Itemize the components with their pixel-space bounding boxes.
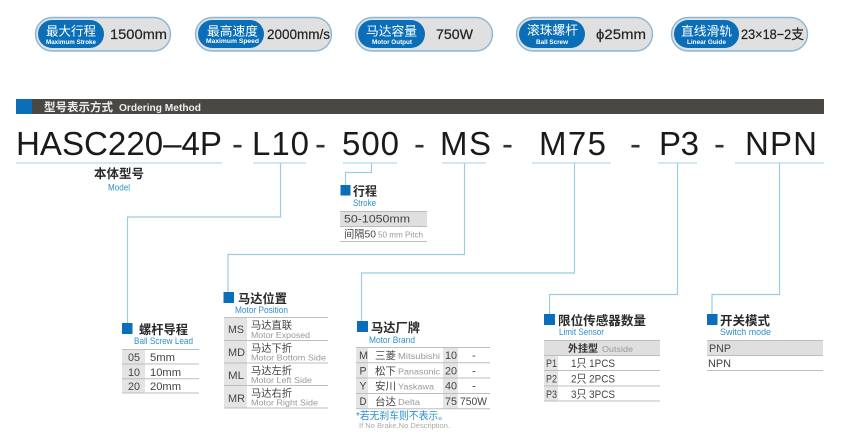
model code string: P3 — [659, 125, 699, 162]
panel: motor brand: 安川 — [375, 380, 396, 392]
panel: limit sensor: P2 — [546, 374, 557, 386]
panel: motor brand: 20 — [445, 366, 457, 378]
model code string — [16, 125, 817, 162]
panel: motor position: 马达下折 — [251, 342, 292, 354]
panel: motor position: Motor Left Side — [251, 375, 312, 385]
panel: motor brand: 750W — [460, 396, 487, 408]
spec badge: maximum stroke — [36, 18, 170, 51]
panel: motor position: 马达左折 — [251, 364, 292, 377]
panel: motor position: MR — [228, 393, 245, 405]
spec badge: maximum speed: 2000mm/s — [267, 27, 330, 42]
model code string: 500 — [342, 125, 399, 162]
underlines and connector lines — [16, 163, 824, 323]
panel: motor position: Motor Bottom Side — [251, 352, 326, 362]
panel: motor brand: D — [360, 396, 366, 408]
panel: ball screw lead: 10mm — [150, 367, 181, 379]
panel: motor position: 马达右折 — [251, 386, 292, 400]
panel: motor position: Motor Exposed — [251, 330, 310, 340]
panel: stroke: 间隔50 — [344, 228, 376, 240]
model code string: - — [714, 125, 725, 162]
panel: motor position: 马达位置 — [238, 291, 287, 306]
panel: stroke: 行程 — [353, 184, 377, 198]
panel: motor brand: 40 — [445, 380, 457, 392]
panel: ball screw lead: 20 — [128, 381, 140, 393]
model code string: MS — [440, 125, 491, 162]
panel: motor brand: Mitsubishi — [398, 351, 440, 361]
model code string: - — [414, 125, 425, 162]
panel: ball screw lead: 05 — [128, 352, 140, 364]
panel: switch mode: 开关模式 — [720, 313, 771, 328]
model code string: L10 — [252, 125, 309, 162]
model code string: - — [630, 125, 641, 162]
spec badge: linear guide: Linear Guide — [687, 40, 727, 46]
label: body model — [94, 166, 144, 192]
panel: switch mode: NPN — [708, 358, 731, 370]
panel: limit sensor: 外挂型 — [568, 342, 598, 355]
panel: stroke: 50-1050mm — [344, 214, 410, 226]
panel: motor brand: 松下 — [375, 364, 396, 378]
panel: limit sensor: Outside — [602, 344, 633, 354]
spec badge: maximum stroke: Maximum Stroke — [46, 40, 97, 46]
spec badge: motor output: 马达容量 — [366, 24, 417, 38]
spec badge: motor output: Motor Output — [372, 40, 412, 46]
panel: limit sensor: 限位传感器数量 — [558, 313, 646, 328]
panel: limit sensor: P1 — [546, 358, 557, 370]
panel: motor brand: P — [360, 366, 366, 378]
panel: motor position: MS — [228, 324, 244, 336]
panel: motor position: Motor Position — [235, 305, 288, 315]
spec badge: motor output — [356, 18, 492, 51]
spec badge: linear guide: 直线滑轨 — [681, 24, 732, 38]
section heading bar: ordering method: Ordering Method — [119, 102, 201, 114]
panel: stroke — [340, 184, 427, 242]
spec badge: maximum stroke: 1500mm — [110, 27, 167, 42]
panel: motor brand: Yaskawa — [398, 382, 434, 392]
panel: switch mode: PNP — [709, 343, 731, 355]
spec badge: motor output: 750W — [436, 27, 473, 42]
footnote: no brake — [356, 409, 450, 430]
panel: motor brand: 10 — [445, 350, 457, 362]
label: body model: Model — [108, 182, 130, 192]
spec badge: ball screw: 滚珠螺杆 — [527, 22, 578, 38]
panel: ball screw lead: 5mm — [150, 352, 175, 364]
section heading bar: ordering method — [16, 99, 824, 114]
spec badge: maximum speed — [196, 18, 332, 51]
model code string: - — [502, 125, 513, 162]
spec badge: maximum speed: 最高速度 — [207, 24, 258, 38]
panel: limit sensor: P3 — [546, 389, 557, 401]
panel: ball screw lead: Ball Screw Lead — [134, 336, 193, 346]
panel: motor brand: 马达厂牌 — [371, 320, 420, 335]
panel: ball screw lead — [122, 322, 199, 393]
panel: motor brand: 75 — [445, 396, 457, 408]
panel: motor brand: - — [472, 380, 476, 392]
spec badge: maximum stroke: 最大行程 — [46, 24, 96, 38]
panel: motor brand: M — [359, 350, 368, 362]
panel: motor brand: 三菱 — [375, 350, 396, 362]
panel: motor brand: Y — [360, 380, 367, 392]
footnote: no brake: If No Brake,No Description. — [359, 421, 450, 430]
panel: motor position: 马达直联 — [251, 318, 292, 332]
model code string: NPN — [745, 125, 817, 162]
spec badge: linear guide: 23×18−2支 — [741, 27, 804, 42]
panel: motor brand — [356, 320, 490, 409]
spec badge: linear guide — [672, 18, 808, 51]
model code string: HASC220–4P — [16, 125, 222, 162]
panel: stroke: 50 mm Pitch — [378, 230, 423, 240]
panel: motor position: ML — [228, 370, 244, 382]
panel: motor brand: - — [472, 366, 476, 378]
spec badge: ball screw: ϕ25mm — [596, 27, 646, 42]
spec badge: ball screw — [516, 18, 652, 51]
panel: ball screw lead: 20mm — [150, 381, 181, 393]
panel: switch mode: Switch mode — [720, 327, 771, 337]
panel: ball screw lead: 螺杆导程 — [139, 322, 188, 337]
model code string: M75 — [539, 125, 606, 162]
panel: stroke: Stroke — [353, 198, 376, 208]
footnote: no brake: *若无刹车则不表示。 — [356, 409, 448, 422]
model code string: - — [232, 125, 243, 162]
panel: limit sensor — [544, 313, 660, 401]
panel: motor brand: Delta — [398, 397, 420, 407]
label: body model: 本体型号 — [94, 166, 144, 181]
panel: motor position: MD — [228, 347, 245, 359]
spec badge: maximum speed: Maximum Speed — [206, 39, 259, 45]
panel: motor brand: Panasonic — [398, 366, 441, 376]
panel: motor position — [224, 291, 328, 408]
section heading bar: ordering method: 型号表示方式 — [44, 100, 114, 114]
panel: motor position: Motor Right Side — [251, 398, 318, 408]
panel: motor brand: Motor Brand — [369, 335, 415, 345]
panel: limit sensor: Limit Sensor — [559, 327, 604, 337]
panel: limit sensor: 1只 1PCS — [571, 358, 615, 370]
panel: switch mode — [707, 313, 823, 370]
panel: motor brand: 台达 — [375, 395, 396, 408]
spec badge: ball screw: Ball Screw — [536, 40, 568, 46]
panel: limit sensor: 2只 2PCS — [571, 374, 615, 386]
panel: limit sensor: 3只 3PCS — [571, 389, 615, 401]
panel: motor brand: - — [472, 350, 476, 362]
panel: ball screw lead: 10 — [128, 367, 140, 379]
model code string: - — [315, 125, 326, 162]
